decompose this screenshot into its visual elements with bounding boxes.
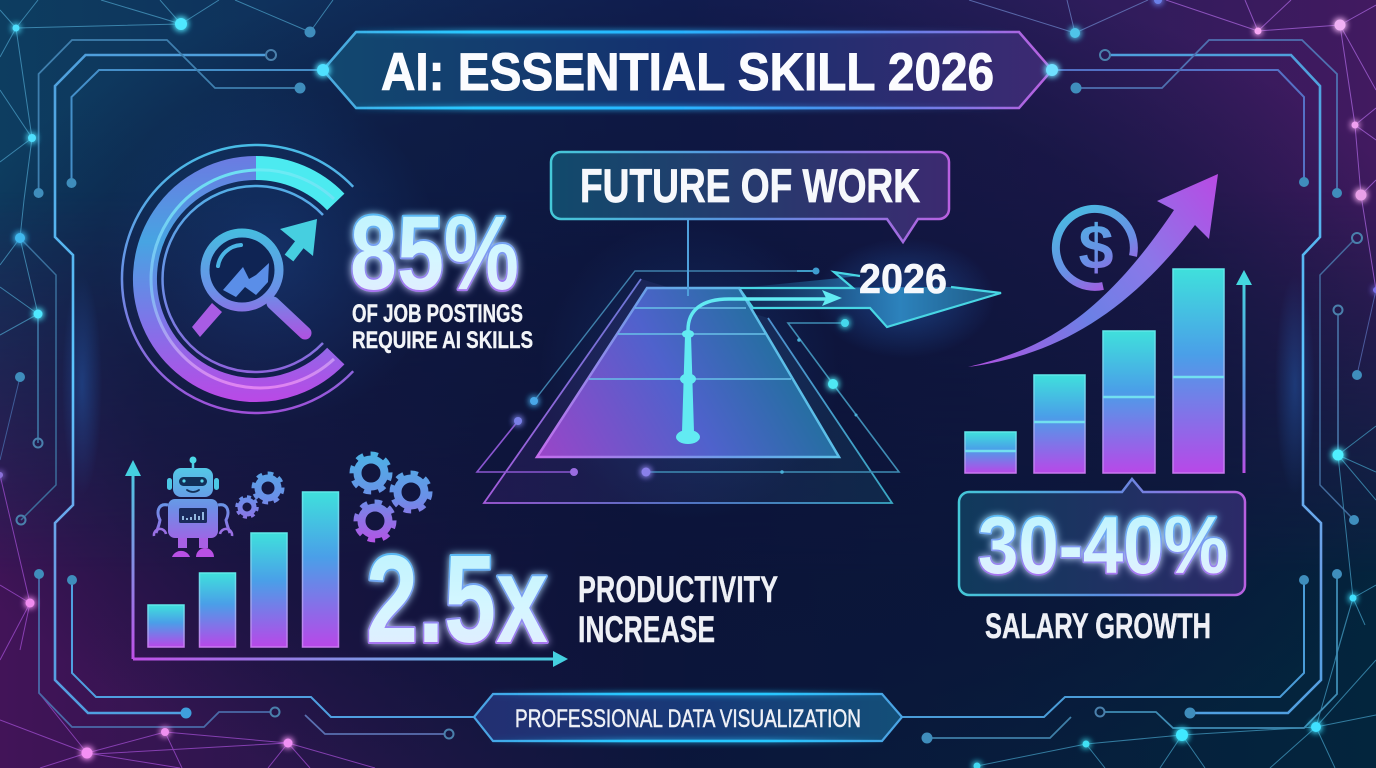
arrow to 2026 bbox=[739, 272, 1001, 327]
icon: dollar coin bbox=[1056, 209, 1134, 287]
label: salary growth: SALARY GROWTH bbox=[985, 607, 1211, 646]
floor plane bbox=[537, 288, 839, 457]
icon: dollar coin: $ bbox=[1078, 213, 1114, 283]
year label: 2026 bbox=[859, 255, 947, 302]
network: top left bbox=[0, 0, 333, 460]
label: of job postings require AI skills: REQUIRE AI SKILLS bbox=[352, 327, 533, 354]
icon: gears bbox=[237, 454, 430, 540]
growth arrow bbox=[968, 174, 1218, 367]
chart axes bbox=[125, 460, 568, 667]
title banner bbox=[317, 32, 1058, 108]
network: bottom left bbox=[0, 475, 375, 768]
plane nodes bbox=[514, 268, 858, 476]
outer plane bbox=[477, 271, 899, 503]
panel: future of work bbox=[477, 152, 1001, 503]
stat: 2.5x: 2.5x bbox=[366, 531, 548, 669]
value box bbox=[959, 479, 1245, 595]
stat: 30-40%: 30-40% bbox=[978, 501, 1228, 591]
icon: robot bbox=[154, 456, 232, 557]
heading callout bbox=[551, 152, 949, 242]
path arrow bbox=[676, 290, 842, 444]
label: of job postings require AI skills bbox=[352, 300, 533, 354]
circuit traces: right bbox=[902, 40, 1354, 738]
panel: 85% job postings bbox=[122, 145, 533, 413]
panel: productivity bbox=[125, 454, 778, 669]
up arrow bbox=[1236, 270, 1252, 473]
label: of job postings require AI skills: OF JOB POSTINGS bbox=[352, 300, 523, 328]
network: top right bbox=[969, 0, 1376, 375]
circuit traces: left bbox=[20, 40, 474, 734]
title text: AI: ESSENTIAL SKILL 2026 bbox=[381, 43, 994, 102]
bar chart bbox=[148, 492, 338, 647]
heading text: FUTURE OF WORK bbox=[580, 159, 920, 212]
icon: magnifying glass with arrow bbox=[192, 219, 317, 337]
label: productivity increase: PRODUCTIVITY bbox=[578, 569, 778, 610]
panel: salary growth bbox=[959, 174, 1252, 646]
stat: 85%: 85% bbox=[350, 195, 519, 312]
footer text: PROFESSIONAL DATA VISUALIZATION bbox=[515, 705, 861, 733]
footer banner bbox=[474, 694, 902, 741]
connector line bbox=[687, 219, 689, 296]
label: productivity increase: INCREASE bbox=[578, 609, 715, 650]
label: productivity increase bbox=[578, 569, 778, 650]
ring gauge bbox=[122, 145, 353, 413]
network: bottom right bbox=[977, 426, 1376, 768]
bar chart bbox=[965, 269, 1224, 473]
